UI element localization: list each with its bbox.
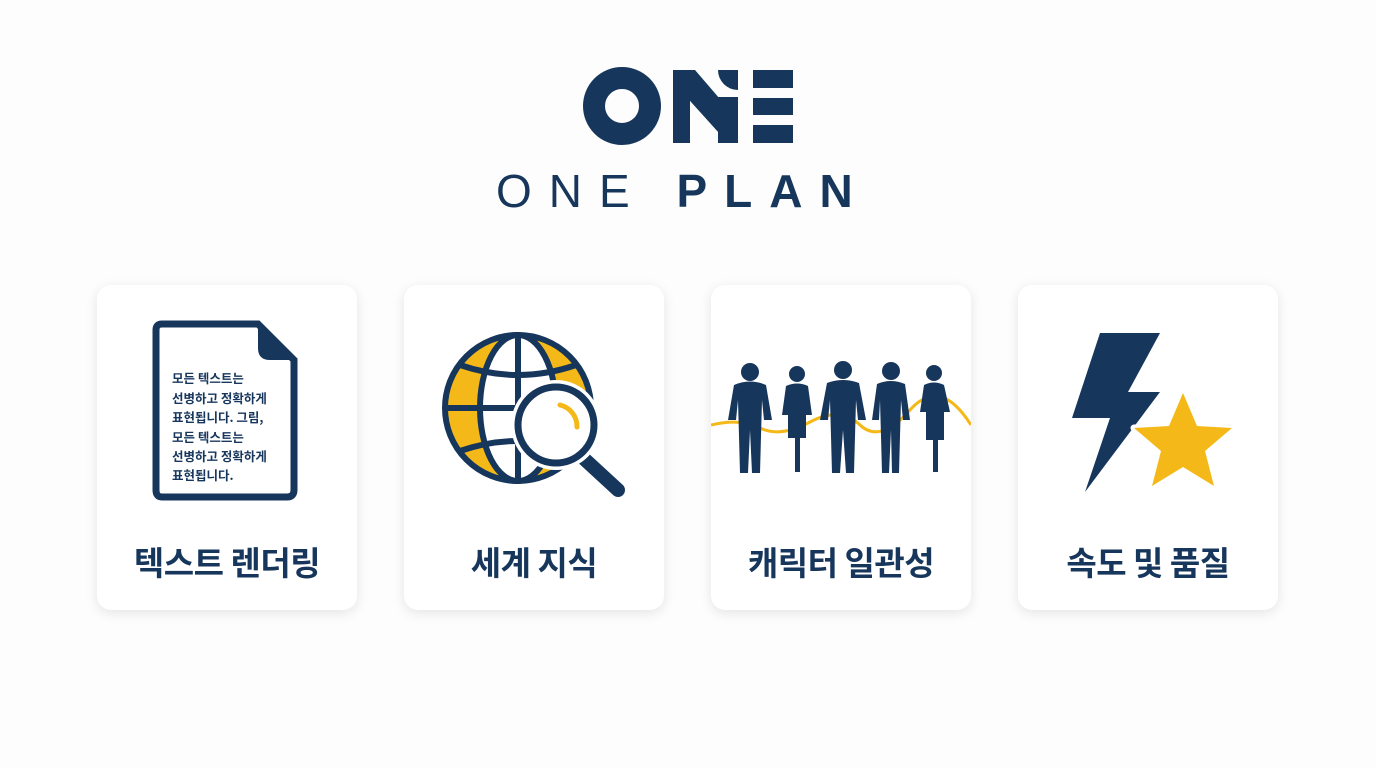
logo: ONE mark — [583, 67, 793, 145]
icon: document: 모든 텍스트는 — [172, 427, 244, 446]
label: 속도 및 품질 — [1066, 537, 1230, 585]
icon: document: 표현됩니다. — [172, 465, 234, 484]
icon: lightning bolt and star — [1072, 333, 1232, 492]
icon: document: 표현됩니다. 그림, — [172, 407, 263, 426]
icon: document: 모든 텍스트는 — [172, 368, 244, 387]
panel: world knowledge — [404, 285, 664, 610]
icon: people silhouettes — [711, 361, 971, 473]
label: 텍스트 렌더링 — [134, 537, 320, 585]
label: 세계 지식 — [471, 537, 597, 585]
icon: document — [152, 320, 298, 500]
panel: character consistency — [711, 285, 971, 610]
icon: document: 선병하고 정확하게 — [172, 388, 267, 407]
icon: document: 선병하고 정확하게 — [172, 446, 267, 465]
panel: text rendering — [97, 285, 357, 610]
icon: globe with magnifier — [442, 332, 625, 497]
panel: speed and quality — [1018, 285, 1278, 610]
title: ONE PLAN: ONE PLAN — [496, 165, 870, 217]
label: 캐릭터 일관성 — [748, 537, 934, 585]
